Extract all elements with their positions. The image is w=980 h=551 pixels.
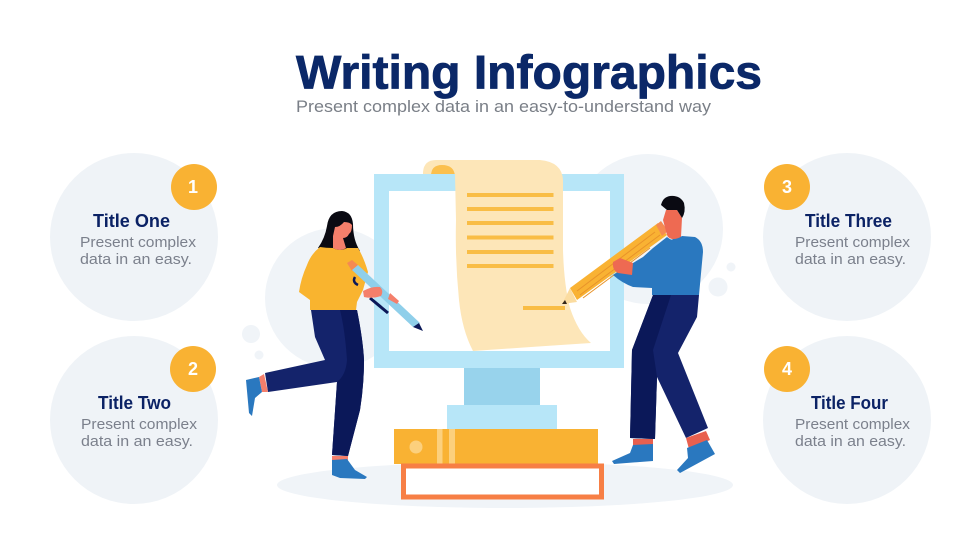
scroll document (443, 160, 591, 351)
text: title three body: Present complex (795, 234, 911, 251)
title: Writing Infographics (296, 46, 762, 98)
text: title two body: data in an easy. (81, 433, 193, 450)
badge 3: 3 (782, 177, 792, 197)
books (394, 429, 602, 497)
heading: title three: Title Three (805, 211, 892, 231)
text: title four body: data in an easy. (795, 433, 906, 450)
panel: title one (50, 153, 218, 321)
heading: title one: Title One (93, 211, 170, 231)
badge 4: 4 (782, 359, 792, 379)
text: title one body (80, 234, 197, 268)
text: title two body (81, 416, 198, 450)
badge 1 (171, 164, 217, 210)
badge 4 (764, 346, 810, 392)
text: title three body: data in an easy. (795, 251, 906, 268)
subtitle: Present complex data in an easy-to-understand way (296, 98, 712, 116)
badge 2: 2 (188, 359, 198, 379)
monitor (374, 174, 624, 429)
scroll back tab (423, 160, 500, 180)
text: title one body: data in an easy. (80, 251, 192, 268)
text: title one body: Present complex (80, 234, 197, 251)
text: title two body: Present complex (81, 416, 198, 433)
badge 3 (764, 164, 810, 210)
badge 2 (170, 346, 216, 392)
text: title three body (795, 234, 911, 268)
big pencil (562, 221, 668, 304)
illustration: writing scene (242, 154, 736, 508)
heading: title four: Title Four (811, 393, 888, 413)
panel: title two (50, 336, 218, 504)
text: title four body: Present complex (795, 416, 911, 433)
panel: title three (763, 153, 931, 321)
background shapes (242, 154, 736, 508)
badge 1: 1 (188, 177, 198, 197)
panel: title four (763, 336, 931, 504)
text: title four body (795, 416, 911, 450)
character: woman (246, 211, 423, 479)
heading: title two: Title Two (98, 393, 171, 413)
pen (347, 260, 423, 331)
character: man (562, 196, 715, 473)
